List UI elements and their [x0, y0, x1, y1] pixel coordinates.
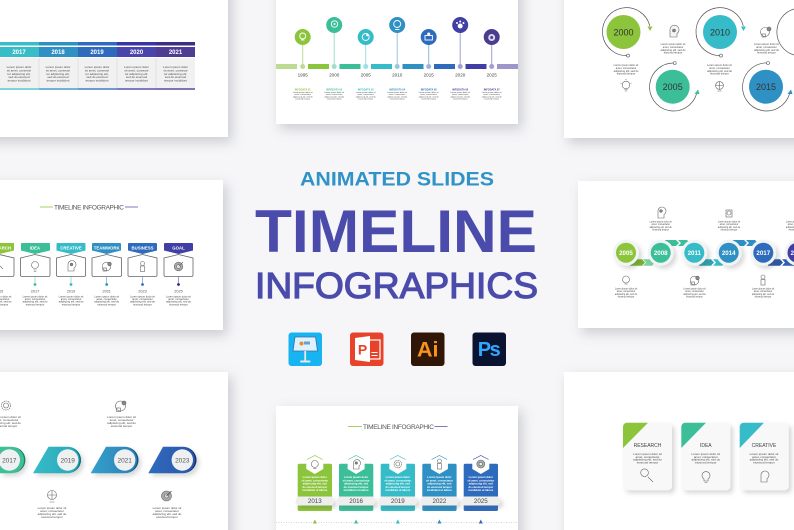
infodata text: Lorem ipsum dolor sit — [293, 91, 313, 94]
timeline years: 2010 — [392, 73, 403, 78]
tab caption texts: adipiscing elit, sed do — [94, 300, 120, 304]
year circles — [613, 240, 794, 266]
colored cards — [298, 464, 498, 511]
year labels: 2019 — [67, 290, 75, 294]
card body texts: adipiscing elit, sed — [303, 482, 327, 486]
tab caption texts: eiusmod tempor — [62, 302, 80, 306]
caption texts: eiusmod tempor — [757, 51, 776, 55]
chevron captions: amet, consectetur — [754, 290, 772, 293]
caption texts — [614, 42, 779, 76]
card body texts: do eiusmod tempor — [385, 485, 410, 489]
tab labels: CREATIVE — [60, 246, 82, 250]
card: creative — [740, 423, 789, 490]
year labels: 2019 — [90, 50, 104, 56]
house outlines — [0, 254, 193, 276]
card: research: adipiscing elit, sed do — [633, 458, 662, 462]
card: idea — [681, 423, 730, 490]
caption texts: Lorem ipsum dolor sit — [707, 63, 732, 67]
panel: top-left year table slide — [0, 0, 228, 137]
card body texts: incididunt ut labore — [302, 488, 328, 492]
caption texts: eiusmod tempor — [710, 72, 729, 76]
card body texts: incididunt ut labore — [468, 488, 494, 492]
segmented timeline bar — [276, 64, 518, 69]
slanted year labels: 2023 — [175, 457, 190, 464]
infodata text: eiusmod tempor — [358, 98, 373, 101]
infodata text: eiusmod tempor — [390, 98, 405, 101]
infodata headings: INFODATA 05 — [421, 88, 437, 92]
table body text: tempor incididunt — [125, 79, 148, 83]
pin markers — [295, 17, 500, 69]
infodata text: Lorem ipsum dolor sit — [356, 91, 376, 94]
circle 2015 — [743, 62, 792, 111]
table body text: tempor incididunt — [86, 79, 109, 83]
table body text: tur adipiscing elit, — [164, 72, 187, 76]
card body texts: do eiusmod tempor — [427, 485, 452, 489]
year table band — [0, 42, 195, 90]
tab labels — [0, 246, 185, 250]
table body text: tempor incididunt — [8, 79, 31, 83]
table body text: sed do eiusmod — [165, 75, 186, 79]
card body texts: Lorem ipsum dolor — [427, 475, 452, 479]
year labels: 2025 — [174, 290, 183, 294]
card icons — [311, 459, 485, 469]
chevron captions: amet, consectetur — [651, 223, 670, 226]
caption texts: adipiscing elit, sed do — [661, 48, 686, 52]
card: idea: eiusmod tempor — [695, 460, 717, 464]
slanted year labels — [2, 457, 190, 464]
table body text: sit amet, consecte — [163, 68, 188, 72]
card: research — [623, 423, 672, 490]
slanted captions: amet, consectetur — [155, 509, 179, 513]
table body text: Lorem ipsum dolor — [85, 65, 109, 69]
slanted captions: eiusmod tempor — [111, 424, 132, 428]
table body text: tur adipiscing elit, — [7, 72, 31, 76]
infodata text: amet, consectetur — [452, 93, 469, 96]
tab labels: GOAL — [172, 246, 185, 250]
year strips — [295, 496, 500, 506]
slanted year shapes — [0, 447, 196, 473]
infodata text: Lorem ipsum dolor sit — [419, 91, 439, 94]
card body texts: Lorem ipsum dolor — [386, 475, 410, 479]
icon: powerpoint: P — [358, 342, 367, 358]
slanted year labels: 2017 — [2, 457, 17, 464]
card: idea: adipiscing elit, sed do — [691, 458, 720, 462]
tab caption texts: amet, consectetur — [96, 297, 117, 301]
timeline years: 2000 — [329, 73, 340, 78]
chevron captions: amet, consectetur — [685, 290, 704, 293]
hexagon notches — [306, 463, 489, 474]
table body text: sed do eiusmod — [126, 75, 147, 79]
strip year labels: 2016 — [349, 498, 364, 505]
card body texts: Lorem ipsum dolor — [303, 475, 327, 479]
tab caption texts: Lorem ipsum dolor sit — [59, 294, 84, 298]
table body text: tempor incididunt — [47, 79, 70, 83]
infodata text: adipiscing elit, sed do — [482, 95, 502, 98]
circle 2000: 2000 — [613, 28, 634, 38]
year circles: 2005 — [619, 250, 633, 257]
panel: middle-right chevron timeline slide — [578, 181, 794, 328]
year labels: 2018 — [51, 50, 65, 56]
tab caption texts: amet, consectetur — [168, 297, 189, 301]
card body texts: adipiscing elit, sed — [469, 482, 493, 486]
caption texts: adipiscing elit, sed do — [707, 69, 732, 73]
chevron roofs — [307, 456, 489, 460]
caption texts: amet, consectetur — [616, 66, 636, 70]
slide title: TIMELINE INFOGRAPHIC — [54, 204, 124, 211]
tab caption texts: Lorem ipsum dolor sit — [130, 294, 155, 298]
year circles: 2014 — [722, 250, 736, 257]
slanted captions: Lorem ipsum dolor sit — [153, 506, 182, 510]
card body texts: do eiusmod tempor — [344, 485, 369, 489]
slanted captions: amet, consectetur — [40, 509, 64, 513]
icon: idea bulb — [620, 79, 632, 91]
chevron captions: Lorem ipsum dolor sit — [683, 288, 706, 290]
chevron captions: eiusmod tempor — [618, 296, 635, 299]
infodata headings: INFODATA 04 — [389, 88, 406, 92]
year labels: 2020 — [130, 50, 144, 56]
card body texts: Lorem ipsum dolor — [344, 475, 368, 479]
tab labels: IDEA — [30, 246, 40, 250]
tab caption texts: amet, consectetur — [61, 297, 81, 301]
card body texts: sit amet, consectetur — [467, 478, 494, 482]
caption texts: adipiscing elit, sed do — [754, 48, 779, 52]
table body text: sit amet, consecte — [124, 68, 149, 72]
tab caption texts: adipiscing elit, sed do — [59, 300, 84, 304]
timeline years: 2025 — [487, 73, 497, 78]
slanted captions: adipiscing elit, sed do — [107, 421, 136, 425]
infodata headings: INFODATA 03 — [358, 88, 374, 92]
card: creative: adipiscing elit, sed do — [750, 458, 779, 462]
slanted captions: adipiscing elit, sed do — [153, 512, 182, 516]
tab caption texts: eiusmod tempor — [97, 302, 116, 306]
tab caption texts: adipiscing elit, sed do — [130, 300, 155, 304]
year labels: 2017 — [31, 290, 39, 294]
strip year labels: 2013 — [308, 498, 322, 505]
tab labels: TEAMWORK — [94, 246, 120, 250]
circle 2015: 2015 — [756, 82, 776, 92]
chevron captions: adipiscing elit, sed do — [650, 226, 673, 229]
card: creative: Lorem ipsum dolor sit — [750, 452, 778, 456]
card: research: Lorem ipsum dolor sit — [633, 452, 662, 456]
caption texts: amet, consectetur — [756, 45, 777, 49]
card body texts: incididunt ut labore — [385, 488, 411, 492]
infodata text: amet, consectetur — [420, 93, 437, 96]
infodata headings — [295, 88, 500, 92]
timeline years: 1995 — [298, 73, 308, 78]
infodata headings: INFODATA 07 — [484, 88, 500, 92]
slanted captions: Lorem ipsum dolor sit — [107, 415, 136, 419]
tab caption texts: amet, consectetur — [132, 297, 153, 301]
colored tabs — [0, 243, 193, 254]
circle 2010: 2010 — [710, 28, 730, 38]
slanted year labels: 2021 — [117, 457, 132, 464]
card body texts — [301, 475, 494, 492]
card body texts: incididunt ut labore — [427, 488, 452, 492]
panel: bottom-centre card timeline slide — [276, 406, 518, 530]
card: research: eiusmod tempor — [637, 460, 658, 464]
chevron captions: adipiscing elit, sed do — [615, 293, 638, 296]
infodata headings: INFODATA 06 — [452, 88, 469, 92]
infodata text: amet, consectetur — [389, 93, 406, 96]
caption texts: eiusmod tempor — [664, 51, 682, 55]
panel: bottom-left slanted timeline slide — [0, 372, 228, 530]
table body text: tur adipiscing elit, — [125, 72, 148, 76]
card body texts: do eiusmod tempor — [468, 485, 493, 489]
slanted icons — [2, 401, 172, 502]
chevron captions — [615, 220, 794, 299]
next circle arc — [777, 9, 794, 55]
card body texts: sit amet, consectetur — [426, 478, 453, 482]
strip year labels: 2025 — [474, 498, 488, 505]
year labels: 2021 — [169, 50, 183, 56]
caption texts: Lorem ipsum dolor sit — [754, 42, 779, 46]
slide title: TIMELINE INFOGRAPHIC — [363, 424, 434, 431]
infodata text: eiusmod tempor — [484, 98, 499, 101]
table body text: sed do eiusmod — [8, 75, 30, 79]
connector dots — [34, 276, 180, 286]
slanted captions — [0, 415, 182, 519]
year circles: 2011 — [688, 250, 702, 257]
infodata text: adipiscing elit, sed do — [356, 95, 376, 98]
circle 2005 — [650, 62, 700, 111]
table body text — [7, 65, 188, 83]
table body text: sed do eiusmod — [47, 75, 69, 79]
panel: top-right circle timeline slide — [564, 0, 794, 138]
card body texts: adipiscing elit, sed — [344, 482, 368, 486]
slanted captions: eiusmod tempor — [156, 515, 178, 519]
table body text: sit amet, consecte — [7, 68, 31, 72]
infodata text: Lorem ipsum dolor sit — [387, 91, 408, 94]
chevron captions: eiusmod tempor — [755, 296, 772, 299]
infodata text: eiusmod tempor — [327, 98, 342, 101]
circle 2000 — [602, 8, 652, 57]
icon: teamwork — [760, 27, 771, 37]
chevron captions: eiusmod tempor — [721, 229, 738, 232]
house icons — [0, 261, 183, 272]
card body texts: sit amet, consectetur — [343, 478, 370, 482]
chevron captions: adipiscing elit, sed do — [683, 293, 706, 296]
infodata headings: INFODATA 02 — [326, 88, 343, 92]
card: creative: amet, consectetur — [752, 455, 776, 459]
chevron captions: adipiscing elit, sed do — [718, 226, 741, 229]
chevron captions: adipiscing elit, sed do — [752, 293, 775, 296]
card: idea: Lorem ipsum dolor sit — [691, 452, 720, 456]
circle 2010 — [696, 8, 746, 57]
card body texts: sit amet, consectetur — [301, 478, 328, 482]
tab caption texts: Lorem ipsum dolor sit — [23, 294, 48, 298]
table body text: Lorem ipsum dolor — [46, 65, 70, 69]
infodata text — [293, 91, 502, 101]
circle 2005: 2005 — [663, 82, 683, 92]
table body text: tempor incididunt — [164, 79, 187, 83]
card body texts: adipiscing elit, sed — [386, 482, 410, 486]
table body text: Lorem ipsum dolor — [124, 65, 149, 69]
timeline years: 2005 — [361, 73, 371, 78]
card: idea: amet, consectetur — [694, 455, 718, 459]
infodata text: amet, consectetur — [483, 93, 500, 96]
card body texts: do eiusmod tempor — [302, 485, 327, 489]
infodata text: Lorem ipsum dolor sit — [450, 91, 471, 94]
strip year labels: 2022 — [433, 498, 447, 505]
card: research: amet, consectetur — [636, 455, 659, 459]
caption texts: eiusmod tempor — [617, 72, 635, 76]
card body texts: adipiscing elit, sed — [427, 482, 452, 486]
card: idea: IDEA — [700, 443, 712, 449]
icon: illustrator — [411, 332, 444, 366]
infodata text: amet, consectetur — [326, 93, 343, 96]
chevron captions: Lorem ipsum dolor sit — [718, 220, 740, 224]
tab caption texts: Lorem ipsum dolor sit — [94, 294, 119, 298]
title: infographics: INFOGRAPHICS — [255, 265, 538, 306]
chevron captions: Lorem ipsum dolor sit — [615, 288, 637, 290]
strip year labels — [308, 498, 488, 505]
chevron captions: amet, consectetur — [617, 290, 635, 293]
year labels — [12, 50, 183, 56]
card: creative: CREATIVE — [752, 443, 777, 449]
icon: photoshop: Ps — [478, 339, 501, 361]
subtitle: animated slides: ANIMATED SLIDES — [300, 168, 494, 190]
panel: bottom-right note cards slide — [564, 372, 794, 530]
tab caption texts: Lorem ipsum dolor sit — [166, 294, 191, 298]
infodata headings: INFODATA 01 — [295, 88, 311, 92]
slanted captions: Lorem ipsum dolor sit — [38, 506, 66, 510]
card body texts: incididunt ut labore — [344, 488, 369, 492]
infodata text: eiusmod tempor — [453, 98, 468, 101]
icon: illustrator: Ai — [417, 338, 438, 362]
year labels: 2023 — [138, 290, 147, 294]
tab caption texts: eiusmod tempor — [26, 302, 44, 306]
chevron captions: amet, consectetur — [720, 223, 738, 226]
panel: middle-left tab timeline slide — [0, 180, 223, 330]
infodata text: adipiscing elit, sed do — [419, 95, 439, 98]
chevron captions: Lorem ipsum dolor sit — [650, 220, 672, 224]
panel: top-centre pin timeline slide — [276, 0, 518, 124]
tab caption texts: eiusmod tempor — [169, 302, 188, 306]
icon: globe — [716, 82, 723, 91]
caption texts: adipiscing elit, sed do — [614, 69, 639, 73]
timeline years — [298, 73, 497, 78]
dotted axis with markers — [276, 520, 518, 524]
tab caption texts: adipiscing elit, sed do — [23, 300, 48, 304]
chevron captions: Lorem ipsum dolor sit — [752, 288, 774, 290]
chevron bands — [630, 240, 794, 266]
infodata text: amet, consectetur — [294, 93, 311, 96]
table body text: tur adipiscing elit, — [85, 72, 109, 76]
slanted captions: eiusmod tempor — [41, 515, 63, 519]
infodata text: adipiscing elit, sed do — [293, 95, 313, 98]
year labels — [0, 290, 183, 294]
infodata text: adipiscing elit, sed do — [450, 95, 471, 98]
tab caption texts: adipiscing elit, sed do — [166, 300, 191, 304]
tab labels: BUSINESS — [132, 246, 154, 250]
icon: powerpoint — [350, 332, 384, 366]
slanted captions: adipiscing elit, sed do — [38, 512, 67, 516]
caption texts: amet, consectetur — [663, 45, 683, 49]
table body text: tur adipiscing elit, — [46, 72, 70, 76]
infodata text: adipiscing elit, sed do — [387, 95, 408, 98]
infodata text: amet, consectetur — [357, 93, 374, 96]
infodata text: eiusmod tempor — [421, 98, 436, 101]
chevron captions: eiusmod tempor — [686, 296, 703, 299]
tab caption texts — [0, 294, 191, 306]
card body texts: Lorem ipsum dolor — [469, 475, 493, 479]
caption texts: amet, consectetur — [709, 66, 730, 70]
icon: keynote — [288, 332, 322, 366]
caption texts: Lorem ipsum dolor sit — [614, 63, 639, 67]
infodata text: eiusmod tempor — [295, 98, 310, 101]
card: creative: eiusmod tempor — [753, 460, 775, 464]
year circles: 2017 — [756, 250, 771, 257]
infodata text: Lorem ipsum dolor sit — [482, 91, 502, 94]
title: timeline: TIMELINE — [255, 198, 537, 265]
year labels: 2017 — [12, 50, 26, 56]
chevron icons — [622, 207, 765, 285]
icon: creative head — [670, 25, 679, 37]
tab caption texts: amet, consectetur — [25, 297, 45, 301]
card: research: RESEARCH — [634, 443, 662, 449]
slanted year labels: 2019 — [60, 457, 75, 464]
infodata text: Lorem ipsum dolor sit — [324, 91, 345, 94]
slanted captions: amet, consectetur — [110, 418, 133, 422]
table body text: sed do eiusmod — [86, 75, 108, 79]
strip year labels: 2019 — [391, 498, 405, 505]
timeline years: 2015 — [424, 73, 434, 78]
table body text: Lorem ipsum dolor — [7, 65, 31, 69]
timeline years: 2020 — [455, 73, 466, 78]
tab caption texts: eiusmod tempor — [133, 302, 152, 306]
card body texts: sit amet, consectetur — [384, 478, 411, 482]
table body text: sit amet, consecte — [46, 68, 70, 72]
infodata text: adipiscing elit, sed do — [324, 95, 345, 98]
chevron captions: eiusmod tempor — [652, 229, 669, 232]
caption texts: Lorem ipsum dolor sit — [661, 42, 686, 46]
year labels: 2021 — [102, 290, 111, 294]
table body text: Lorem ipsum dolor — [163, 65, 188, 69]
year circles: 2008 — [654, 250, 668, 257]
table body text: sit amet, consecte — [85, 68, 109, 72]
icon: photoshop — [472, 332, 506, 366]
